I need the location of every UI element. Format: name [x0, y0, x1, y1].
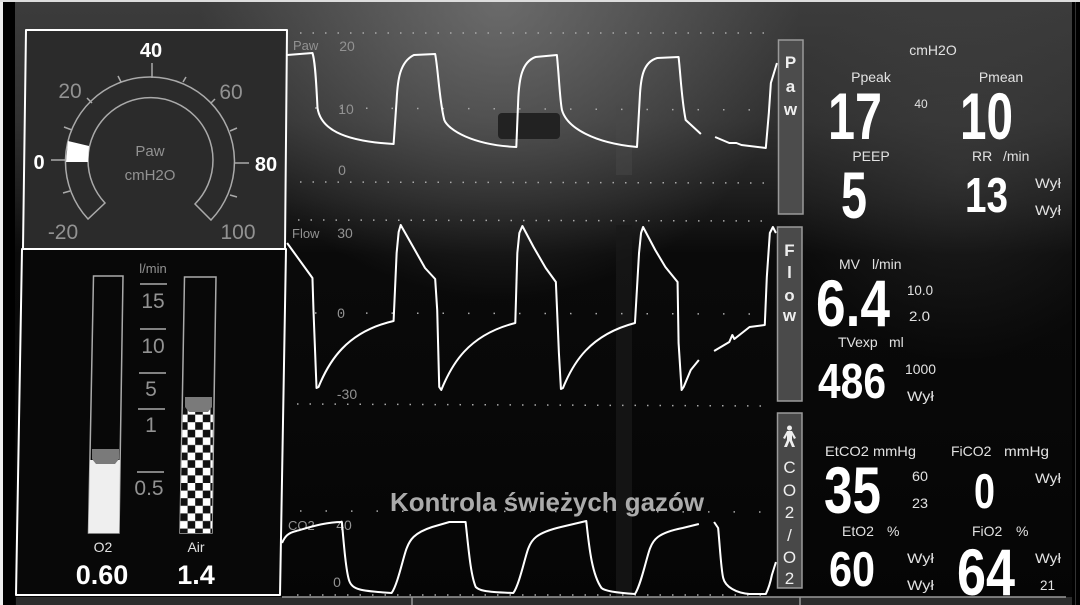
button: CO2/O2: 2 — [785, 569, 794, 588]
RR reading: Wył — [1035, 175, 1062, 191]
gauge unit label: cmH2O — [125, 167, 175, 184]
FiO2 reading: % — [1016, 523, 1028, 539]
EtO2 reading: EtO2 — [842, 523, 874, 539]
flow scale: 15 — [141, 290, 165, 313]
Air reading: 1.4 — [177, 560, 215, 590]
PEEP reading: 5 — [841, 158, 867, 232]
MV reading: 10.0 — [907, 282, 933, 298]
button: CO2/O2: 2 — [785, 503, 794, 522]
EtO2 reading: % — [887, 523, 899, 539]
chart: Paw waveform: 10 — [338, 101, 354, 117]
gauge scale labels: 80 — [255, 154, 277, 176]
Ppeak reading: 17 — [828, 79, 882, 153]
TVexp reading: 486 — [818, 355, 886, 409]
readings: gas concentrations — [824, 443, 1062, 605]
FiO2 reading: FiO2 — [972, 523, 1003, 539]
flow scale: 10 — [141, 335, 165, 358]
panel: Paw gauge — [23, 30, 287, 248]
MV reading: 2.0 — [909, 308, 930, 324]
readings: airway pressure — [828, 42, 1062, 232]
RR reading: 13 — [965, 169, 1008, 223]
panel: gas flow meters — [16, 249, 286, 595]
O2 reading: 0.60 — [76, 560, 128, 590]
chart: Paw waveform: Paw — [293, 38, 319, 53]
gauge unit label: Paw — [135, 143, 165, 160]
gauge pressure indicator — [66, 141, 89, 162]
gauge unit label — [125, 143, 175, 184]
FiCO2 reading: mmHg — [1004, 443, 1049, 459]
FiCO2 reading: 0 — [974, 465, 995, 519]
O2 reading: O2 — [94, 539, 113, 555]
gauge scale labels: 60 — [219, 81, 243, 104]
gauge scale labels: 100 — [220, 221, 256, 244]
button: Flow — [778, 227, 802, 401]
gauge scale labels: -20 — [48, 221, 78, 244]
button: CO2/O2: O — [783, 548, 796, 567]
EtCO2 reading — [824, 443, 928, 527]
footer bar — [16, 597, 1072, 605]
chart: CO2 waveform — [282, 511, 776, 595]
button: CO2/O2: C — [783, 458, 796, 477]
FiCO2 reading: Wył — [1035, 470, 1062, 486]
readings: ventilation volume — [816, 256, 936, 409]
O2 flow tube — [88, 276, 123, 533]
MV reading — [816, 256, 933, 340]
button: Flow: w — [782, 306, 797, 325]
FiO2 reading: 21 — [1040, 577, 1055, 593]
gauge tick marks — [51, 63, 249, 197]
Pmean reading: 10 — [960, 79, 1013, 153]
RR reading — [965, 148, 1062, 223]
gauge scale labels — [33, 40, 277, 244]
gauge scale labels: 40 — [140, 40, 162, 62]
flow scale: l/min — [139, 261, 167, 276]
flow scale: 1 — [145, 414, 157, 437]
EtO2 reading: Wył — [907, 577, 935, 593]
button: Flow: F — [784, 241, 795, 260]
chart: CO2 waveform: 0 — [333, 574, 341, 590]
flow scale: 5 — [145, 378, 157, 401]
gauge scale labels: 0 — [33, 152, 45, 174]
readings: airway pressure: 40 — [914, 97, 928, 111]
RR reading: RR — [972, 148, 992, 164]
Air reading — [177, 539, 215, 590]
MV reading: l/min — [872, 256, 902, 272]
TVexp reading — [818, 334, 936, 409]
FiO2 reading — [957, 523, 1062, 605]
button: CO2/O2 — [778, 413, 802, 588]
FiCO2 reading: FiCO2 — [951, 443, 992, 459]
TVexp reading: TVexp — [838, 334, 878, 350]
EtO2 reading: Wył — [907, 550, 935, 566]
TVexp reading: ml — [889, 334, 904, 350]
button: CO2/O2: / — [787, 526, 792, 545]
RR reading: Wył — [1035, 202, 1062, 218]
button: Flow: o — [784, 286, 795, 305]
gauge arc — [65, 77, 234, 220]
Air flow tube — [180, 277, 216, 533]
FiCO2 reading — [951, 443, 1062, 519]
PEEP reading — [841, 148, 890, 232]
Ppeak reading: Ppeak — [851, 69, 892, 85]
chart: CO2 waveform: CO2 — [288, 518, 315, 533]
chart: Flow waveform: Flow — [292, 226, 320, 241]
chart: Flow waveform: -30 — [337, 386, 357, 402]
button: CO2/O2: O — [783, 481, 796, 500]
readings: airway pressure: cmH2O — [909, 42, 957, 58]
TVexp reading: 1000 — [905, 361, 936, 377]
Pmean reading: Pmean — [979, 69, 1023, 85]
FiO2 reading: Wył — [1035, 550, 1062, 566]
message: fresh gas control: Kontrola świeżych gazów — [390, 487, 705, 517]
RR reading: /min — [1003, 148, 1029, 164]
chart: CO2 waveform: 40 — [336, 517, 352, 533]
chart: Flow waveform: 0 — [337, 305, 345, 321]
PEEP reading: PEEP — [852, 148, 890, 164]
button: Flow: l — [787, 263, 792, 282]
flow scale: 0.5 — [134, 477, 164, 500]
button: Paw: w — [783, 100, 798, 119]
chart: Flow waveform — [287, 220, 776, 406]
MV reading: 6.4 — [816, 266, 890, 340]
EtO2 reading: 60 — [829, 543, 875, 597]
O2 reading — [76, 539, 128, 590]
button: Paw: a — [786, 77, 796, 96]
EtCO2 reading: 60 — [912, 468, 928, 484]
EtO2 reading — [829, 523, 935, 597]
chart: Paw waveform — [287, 33, 777, 183]
flow scale — [134, 261, 167, 500]
EtCO2 reading: EtCO2 mmHg — [825, 443, 916, 459]
icon: person — [783, 426, 796, 447]
chart: Paw waveform: 20 — [339, 38, 355, 54]
chart: Paw waveform: 0 — [338, 162, 346, 178]
button: Paw: P — [785, 53, 796, 72]
button: Paw — [778, 40, 803, 214]
EtCO2 reading: 23 — [912, 495, 928, 511]
gauge scale labels: 20 — [58, 80, 82, 103]
EtCO2 reading: 35 — [824, 453, 881, 527]
MV reading: MV — [839, 256, 861, 272]
TVexp reading: Wył — [907, 388, 935, 404]
Air reading: Air — [187, 539, 205, 555]
chart: Flow waveform: 30 — [337, 225, 353, 241]
